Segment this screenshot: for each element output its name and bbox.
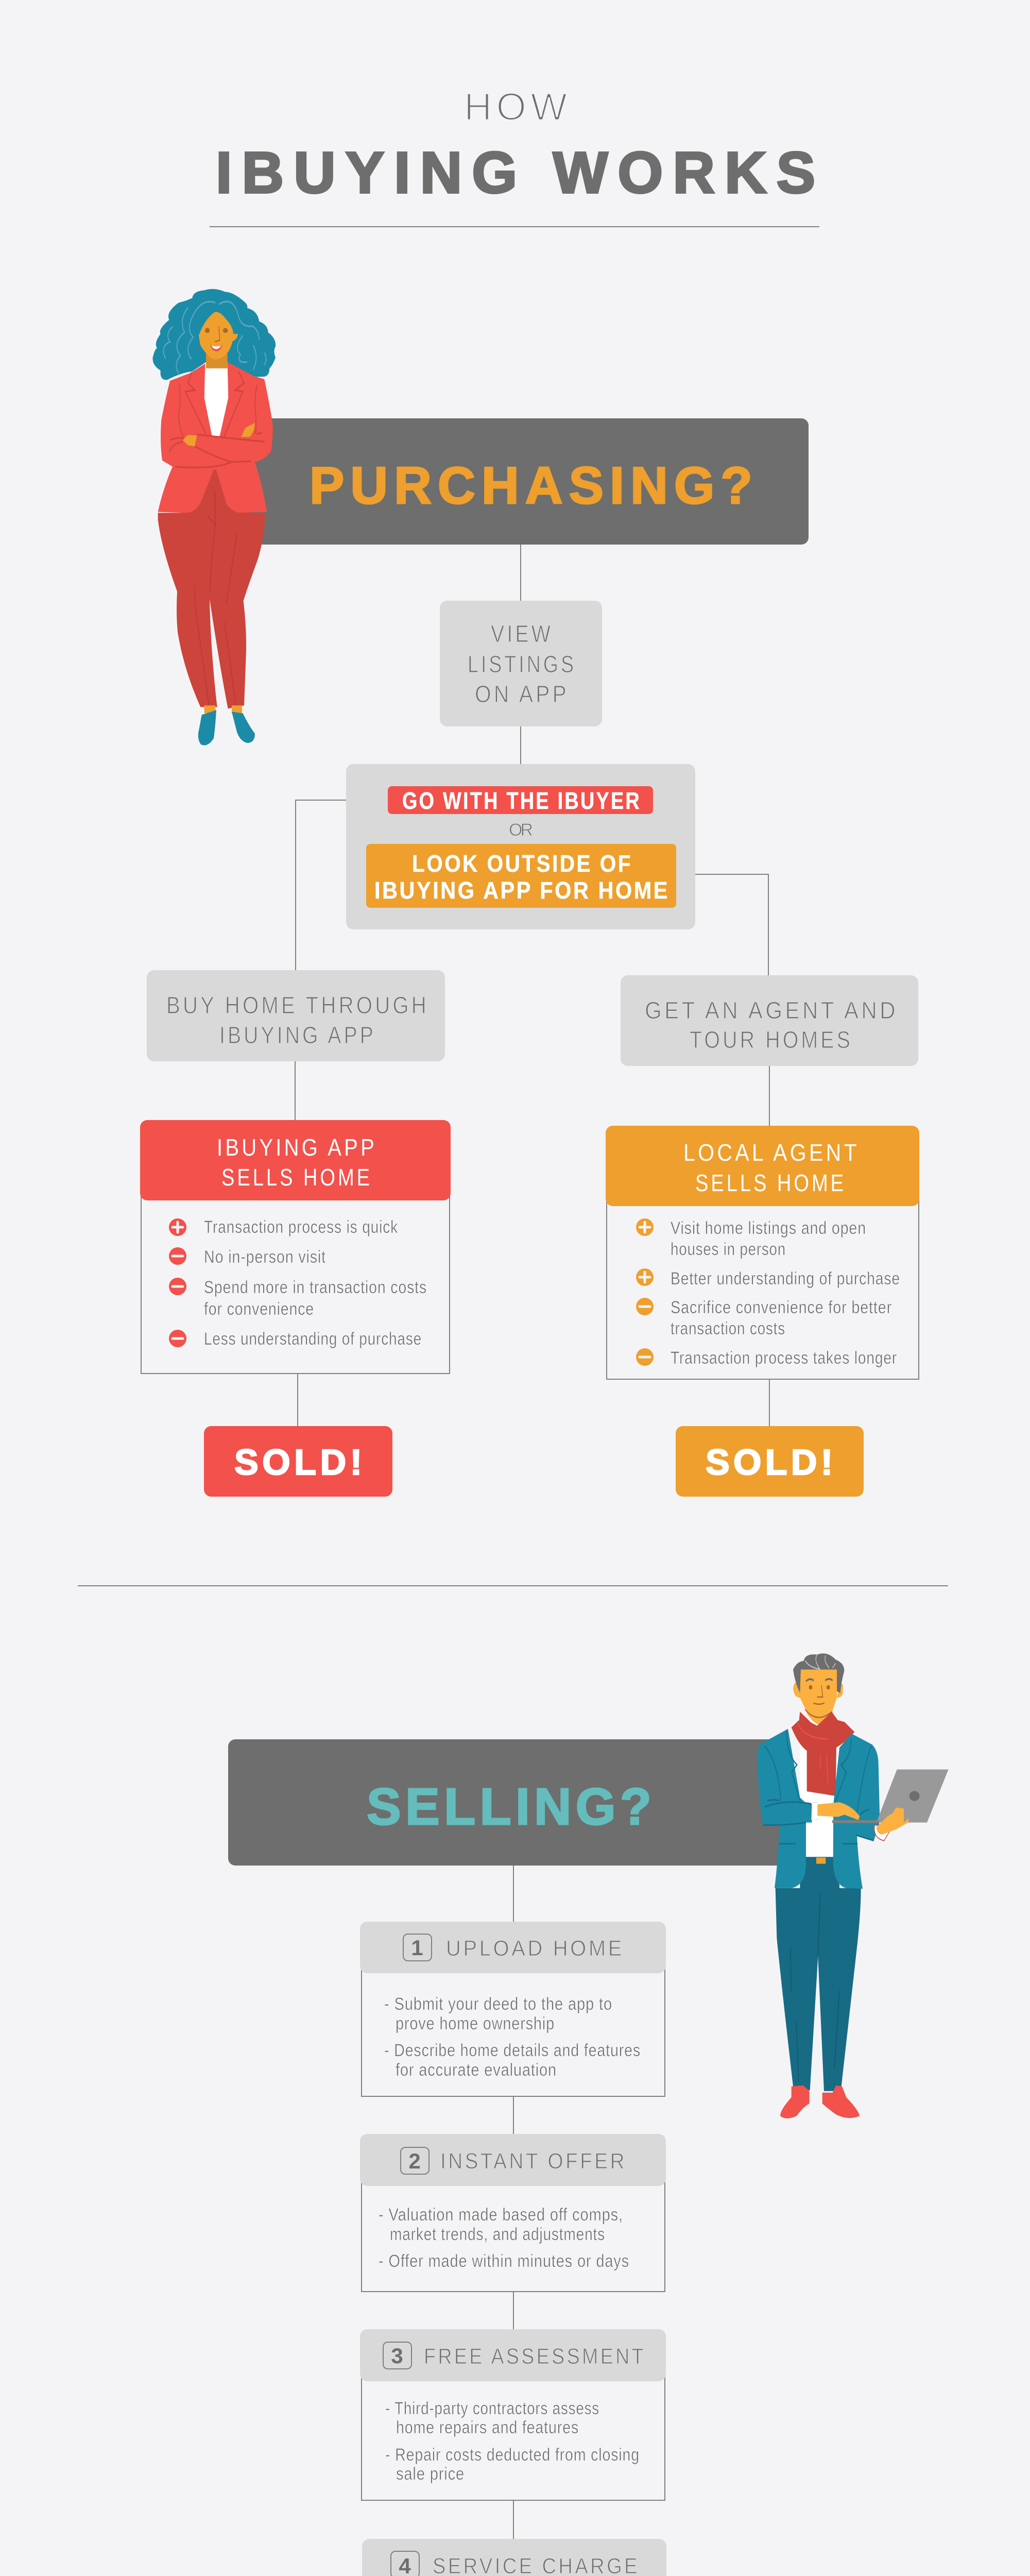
connector: to agent route: [676, 874, 768, 975]
step header: [360, 2134, 666, 2186]
box: view listings on app: ON APP: [475, 681, 569, 707]
connector: [520, 545, 521, 601]
step header: INSTANT OFFER: [440, 2149, 627, 2174]
connector: [769, 1379, 770, 1426]
panel: step 4 service charge: [362, 2539, 666, 2576]
panel header: SELLS HOME: [695, 1170, 846, 1196]
option: go with the ibuyer: GO WITH THE IBUYER: [402, 787, 641, 814]
pros and cons list: transaction costs: [671, 1319, 785, 1338]
step text: prove home ownership: [396, 2014, 555, 2033]
step text: - Repair costs deducted from closing: [385, 2445, 640, 2465]
panel header: SELLS HOME: [221, 1164, 372, 1191]
connector: [513, 2292, 514, 2329]
icon: plus: [636, 1218, 654, 1236]
panel: step 1 upload home: [360, 1922, 666, 2096]
sold badge: red: [204, 1426, 392, 1497]
pros and cons list: for convenience: [204, 1299, 314, 1319]
pros and cons list: [204, 1217, 427, 1349]
pros and cons list: Transaction process is quick: [204, 1217, 398, 1237]
connector: [769, 1066, 770, 1126]
box: buy home through ibuying app: IBUYING APP: [219, 1022, 376, 1048]
connector: [295, 1061, 296, 1120]
panel: step 3 free assessment: [360, 2329, 666, 2500]
pros and cons list: No in-person visit: [204, 1247, 326, 1267]
panel header: [606, 1126, 919, 1206]
step text: [385, 2399, 640, 2484]
panel header: [140, 1120, 451, 1200]
icon: minus: [636, 1298, 654, 1315]
step text: - Third-party contractors assess: [385, 2399, 599, 2418]
panel: step 2 instant offer: [360, 2134, 666, 2292]
step text: - Submit your deed to the app to: [384, 1994, 612, 2014]
connector: [513, 1866, 514, 1922]
text: or: OR: [509, 820, 533, 840]
box: buy home through ibuying app: BUY HOME THROUGH: [166, 992, 429, 1019]
box: buy home through ibuying app: [147, 970, 445, 1061]
title line: ibuying works: IBUYING WORKS: [216, 140, 815, 205]
option: look outside of app: IBUYING APP FOR HOME: [374, 877, 670, 904]
step text: - Offer made within minutes or days: [379, 2251, 629, 2271]
connector: [297, 1374, 298, 1426]
box: view listings on app: VIEW: [491, 620, 553, 647]
connector: [513, 2096, 514, 2134]
box: get an agent and tour homes: TOUR HOMES: [690, 1026, 853, 1053]
step text: sale price: [396, 2464, 465, 2484]
sold badge: orange: SOLD!: [706, 1442, 833, 1482]
box: get an agent and tour homes: [621, 975, 918, 1066]
illustration: woman with crossed arms: [153, 289, 276, 745]
step text: [379, 2205, 629, 2271]
pros and cons list: Spend more in transaction costs: [204, 1278, 427, 1297]
title line: how: HOW: [464, 85, 567, 128]
title: [216, 85, 815, 205]
step header: FREE ASSESSMENT: [424, 2344, 646, 2369]
pros and cons list: Better understanding of purchase: [671, 1269, 900, 1289]
pros and cons list: Visit home listings and open: [671, 1218, 866, 1238]
box: view listings on app: [440, 601, 602, 726]
pros and cons list: Sacrifice convenience for better: [671, 1298, 892, 1317]
connector: to buy home through app: [296, 800, 388, 970]
icon: minus: [169, 1247, 186, 1265]
step text: for accurate evaluation: [396, 2060, 557, 2080]
sold badge: red: SOLD!: [234, 1442, 362, 1482]
panel header: LOCAL AGENT: [683, 1139, 860, 1166]
icon: plus: [636, 1268, 654, 1286]
illustration: man with laptop: [758, 1653, 949, 2119]
box: get an agent and tour homes: GET AN AGENT AND: [645, 997, 898, 1024]
icon: minus: [169, 1330, 186, 1347]
icon: plus: [169, 1218, 186, 1236]
step text: [384, 1994, 641, 2080]
option: look outside of app: [366, 844, 676, 908]
connector: [513, 2500, 514, 2539]
step text: - Valuation made based off comps,: [379, 2205, 623, 2225]
panel: local agent sells home: [606, 1126, 919, 1379]
panel: selling heading: [228, 1739, 789, 1866]
step text: home repairs and features: [396, 2418, 579, 2437]
pros and cons list: [671, 1218, 900, 1368]
pros and cons list: Transaction process takes longer: [671, 1348, 897, 1368]
pros and cons list: Less understanding of purchase: [204, 1329, 422, 1349]
step header: 3: [391, 2344, 403, 2368]
box: view listings on app: LISTINGS: [468, 651, 576, 677]
step text: - Describe home details and features: [384, 2041, 641, 2060]
step header: 1: [411, 1936, 423, 1960]
icon: minus: [636, 1348, 654, 1366]
pros and cons list: houses in person: [671, 1240, 786, 1259]
step header: [362, 2539, 666, 2576]
step header: 2: [408, 2149, 421, 2173]
panel header: IBUYING APP: [217, 1134, 377, 1161]
step header: [360, 1922, 666, 1973]
panel: purchase decision: [346, 764, 695, 929]
connector: [520, 726, 521, 765]
option: look outside of app: LOOK OUTSIDE OF: [412, 850, 632, 877]
step header: [360, 2329, 666, 2381]
panel: ibuying app sells home: [140, 1120, 451, 1374]
heading: selling: SELLING?: [367, 1778, 651, 1836]
sold badge: orange: [676, 1426, 864, 1497]
panel: purchasing heading: [247, 418, 809, 545]
step header: UPLOAD HOME: [446, 1936, 624, 1961]
icon: minus: [169, 1278, 186, 1295]
step text: market trends, and adjustments: [390, 2225, 605, 2244]
heading: purchasing: PURCHASING?: [310, 457, 752, 515]
